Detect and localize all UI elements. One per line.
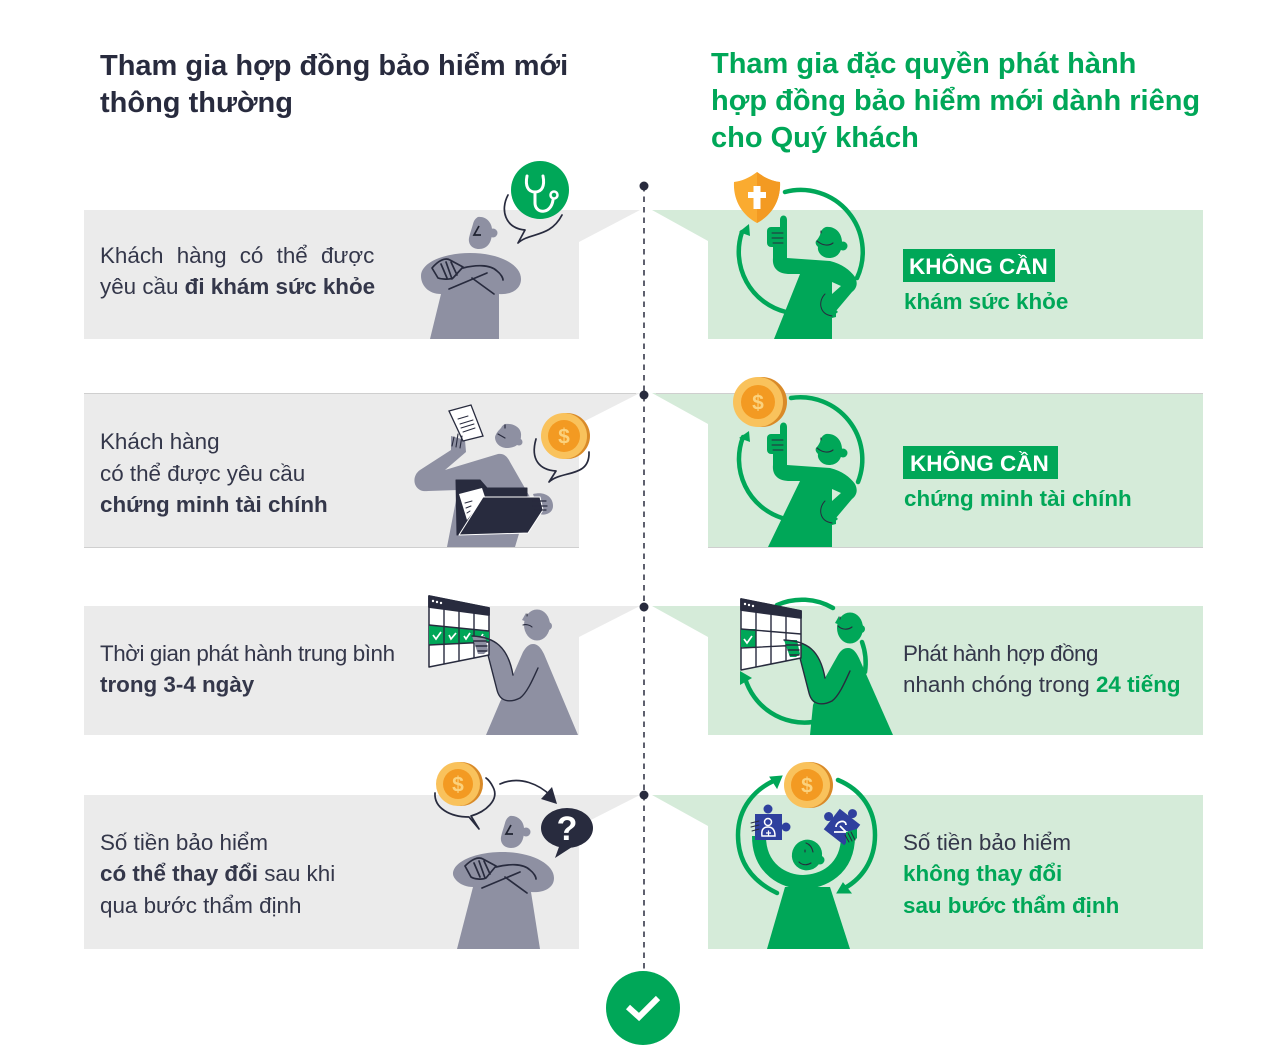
timeline: dashed centre line with dots — [640, 182, 648, 975]
icon: coin speech bubble row 4 — [435, 762, 495, 829]
text: row 4 right: Số tiền bảo hiểm — [903, 830, 1071, 855]
text: row 3 left: Thời gian phát hành trung bình — [100, 641, 395, 666]
figure: row 2 person with document and folder — [414, 405, 553, 547]
text: row 3 right: Phát hành hợp đồng — [903, 641, 1098, 666]
text: row 2 left: Khách hàng — [100, 429, 220, 454]
text: row 4 left: sau khi — [258, 861, 335, 886]
panel: right row 3 background — [652, 606, 1203, 735]
icon: large coin row 2 — [733, 377, 787, 427]
icon: orange shield with cross — [734, 172, 780, 223]
icon: final green check — [606, 971, 680, 1045]
panel: left row 2 background — [84, 393, 640, 547]
text: row 4 left: có thể thay đổi — [100, 861, 258, 886]
figure: row 1 person arms crossed — [421, 217, 521, 339]
icon: question speech bubble: ? — [557, 810, 577, 848]
arrow: coin to question — [500, 781, 557, 804]
icon: coin speech bubble: $ — [558, 426, 570, 448]
panel: right row 4 background — [652, 795, 1203, 949]
heading: standard contract: thông thường — [100, 87, 293, 119]
panel: right row 2 background — [652, 393, 1203, 547]
text: row 3 right: nhanh chóng trong — [903, 672, 1096, 697]
icon: coin speech bubble row 4: $ — [452, 774, 464, 796]
figure: row 3 green person with calendar — [740, 599, 893, 735]
badge: row 2 không cần: KHÔNG CẦN — [910, 451, 1049, 476]
heading: exclusive privilege: Tham gia đặc quyền phát hành — [711, 48, 1136, 80]
text: row 4 left: Số tiền bảo hiểm — [100, 830, 268, 855]
heading: exclusive privilege: cho Quý khách — [711, 122, 919, 154]
panel: left row 4 background — [84, 795, 640, 949]
icon: coin row 4 right: $ — [801, 774, 813, 798]
panel: left row 3 background — [84, 606, 640, 735]
text: row 4 right: không thay đổi — [903, 861, 1062, 886]
figure: row 3 person with calendar — [429, 596, 578, 735]
text: row 1 left second line: yêu cầu đi khám sức khỏe — [100, 274, 375, 299]
icon: coin row 4 right — [784, 762, 833, 808]
text: row 4 left: qua bước thẩm định — [100, 893, 301, 918]
icon: coin speech bubble — [534, 413, 590, 482]
badge: row 1 không cần: KHÔNG CẦN — [909, 254, 1048, 279]
figure: row 4 person arms crossed — [453, 816, 554, 949]
icon: stethoscope speech bubble — [504, 161, 569, 243]
heading: exclusive privilege: hợp đồng bảo hiểm mới dành riêng — [711, 85, 1200, 117]
text: row 1 right: khám sức khỏe — [904, 289, 1068, 314]
text: row 2 right: chứng minh tài chính — [904, 486, 1132, 511]
figure: row 2 green person with thumb up — [739, 397, 862, 547]
badge: row 1 không cần — [903, 249, 1055, 282]
text: row 2 left: có thể được yêu cầu — [100, 461, 305, 486]
heading: standard contract: Tham gia hợp đồng bảo hiểm mới — [100, 50, 568, 82]
text: row 2 left: chứng minh tài chính — [100, 492, 328, 517]
text: row 3 left: trong 3-4 ngày — [100, 672, 255, 697]
figure: row 4 green person with puzzle pieces — [738, 776, 875, 949]
icon: question speech bubble — [541, 808, 593, 858]
panel: right row 1 background — [652, 210, 1203, 339]
panel: left row 1 background — [84, 210, 640, 339]
badge: row 2 không cần — [903, 446, 1058, 479]
text: row 4 right: sau bước thẩm định — [903, 893, 1119, 918]
icon: large coin row 2: $ — [752, 392, 764, 414]
figure: row 1 green person with thumb up — [739, 190, 863, 339]
text: row 1 left: Khách hàng có thể được — [100, 243, 374, 268]
text: row 3 right: 24 tiếng — [1096, 672, 1181, 697]
